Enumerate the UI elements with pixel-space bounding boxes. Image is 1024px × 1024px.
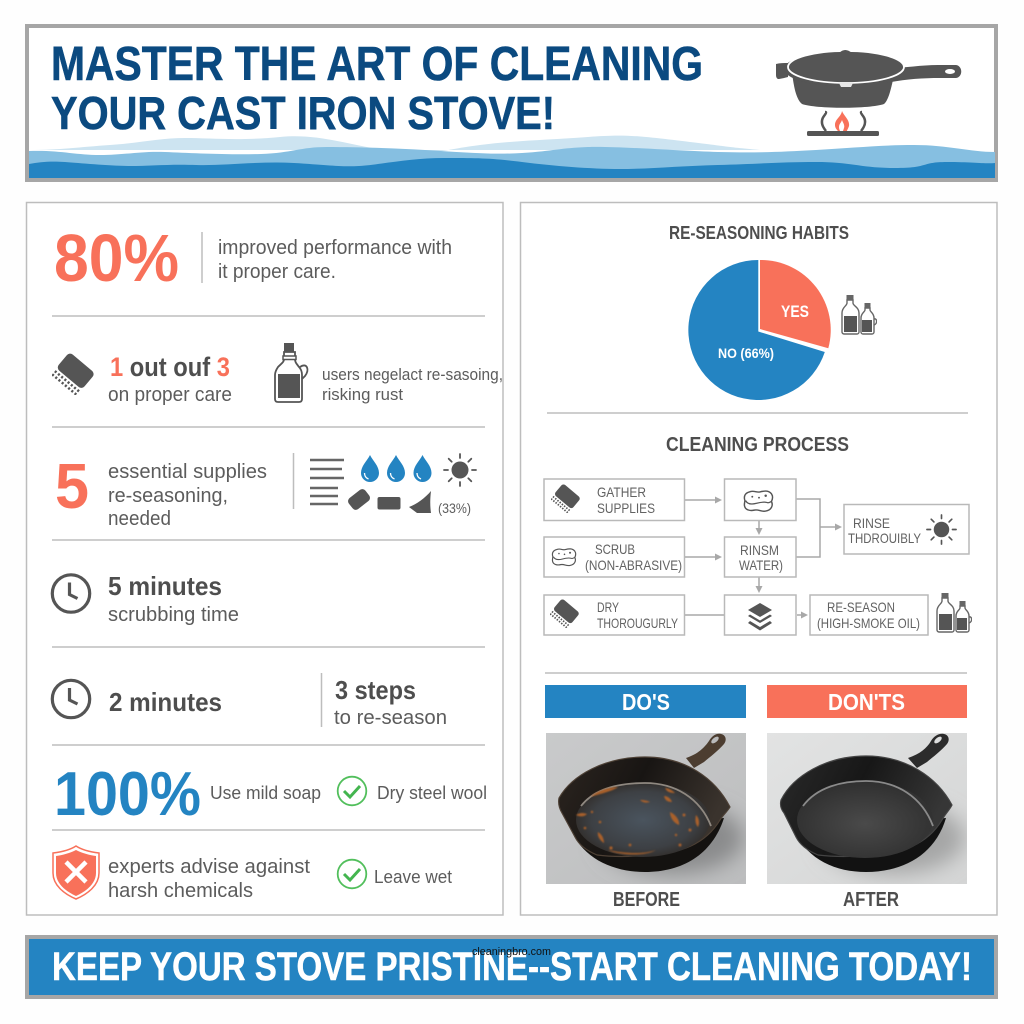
stat: 5 minutes: 5 minutes — [108, 571, 222, 601]
stat: 2 minutes and 3 steps: 3 steps — [335, 675, 416, 705]
pie chart — [688, 260, 831, 400]
stat: 80 percent — [54, 221, 452, 296]
icon: check — [338, 860, 366, 888]
stat: 1 out of 3: on proper care — [108, 384, 232, 406]
step: scrub: SCRUB — [595, 541, 635, 557]
step: gather supplies: GATHER — [597, 484, 646, 500]
footer call to action — [27, 937, 996, 997]
label: before: BEFORE — [613, 889, 680, 911]
flow connectors — [684, 496, 842, 618]
icon: oil bottles — [842, 295, 877, 334]
stat: 100 percent: 100% — [54, 760, 201, 829]
step: rinse thoroughly — [844, 504, 969, 554]
stat: 2 minutes and 3 steps: 2 minutes — [109, 687, 222, 717]
step: dry: DRY — [597, 599, 619, 615]
warning: harsh chemicals: harsh chemicals — [108, 880, 253, 902]
stat: 5 essential supplies: re-seasoning, — [108, 485, 228, 507]
step: rinse water — [724, 537, 796, 577]
icon: sun — [444, 454, 476, 486]
stat: 5 minutes — [52, 571, 239, 626]
icon: skillet on burner — [776, 50, 961, 136]
stat: 2 minutes and 3 steps — [52, 673, 447, 729]
pie chart: YES — [781, 302, 809, 321]
step: rinse thoroughly: THDROUIBLY — [848, 530, 922, 546]
step: dry — [544, 595, 684, 635]
stat: 100 percent: Dry steel wool — [377, 782, 487, 803]
step: rinse thoroughly: RINSE — [853, 515, 890, 531]
watermark: cleaningbro.com — [472, 946, 551, 958]
title: MASTER THE ART OF CLEANING — [51, 38, 703, 91]
stat: 1 out of 3: users negelact re-sasoing, — [322, 366, 503, 384]
do's header — [545, 685, 746, 718]
header banner — [27, 26, 996, 180]
heading: re-seasoning habits: RE-SEASONING HABITS — [669, 223, 849, 243]
do's header: DO'S — [622, 689, 670, 715]
step: re-season: RE-SEASON — [827, 599, 895, 615]
label: after: AFTER — [843, 889, 899, 911]
title: YOUR CAST IRON STOVE! — [51, 87, 555, 139]
header waves — [29, 136, 995, 178]
stat: 5 essential supplies: needed — [108, 508, 171, 530]
step: dry: THOROUGURLY — [597, 615, 678, 631]
icon: oil bottle — [275, 343, 307, 402]
heading: cleaning process: CLEANING PROCESS — [666, 434, 849, 456]
don'ts header — [767, 685, 967, 718]
icon: supply tools — [346, 487, 431, 513]
step: scrub: (NON-ABRASIVE) — [585, 557, 682, 573]
stat: 5 minutes: scrubbing time — [108, 604, 239, 626]
photo: clean skillet after — [767, 733, 967, 884]
step: re-season: (HIGH-SMOKE OIL) — [817, 615, 920, 631]
step: sponge — [724, 479, 796, 520]
don'ts header: DON'TS — [828, 689, 905, 715]
stat: 1 out of 3: 1 out ouf 3 — [110, 352, 230, 382]
step: rinse water: RINSM — [740, 542, 779, 558]
stat: 5 essential supplies: 5 — [55, 450, 89, 522]
photo: rusty skillet before — [546, 733, 746, 884]
stat: 80 percent: 80% — [54, 221, 179, 296]
stat: 5 essential supplies: (33%) — [438, 500, 471, 516]
pie chart: NO (66%) — [718, 345, 774, 361]
icon: oil bottles — [937, 593, 972, 632]
stat: 5 essential supplies — [55, 450, 476, 530]
icon: clock — [52, 680, 90, 718]
stat: 1 out of 3 — [51, 343, 503, 406]
stat: 5 essential supplies: essential supplies — [108, 461, 267, 483]
stat: 80 percent: improved performance with — [218, 237, 452, 259]
stat: 2 minutes and 3 steps: to re-season — [334, 707, 447, 729]
icon: shield — [53, 846, 99, 899]
icon: water drops — [361, 455, 432, 482]
title — [51, 38, 703, 139]
stat: 1 out of 3: risking rust — [322, 385, 403, 404]
stat: 100 percent: Use mild soap — [210, 782, 321, 803]
left statistics panel — [26, 202, 503, 915]
step: rinse water: WATER) — [739, 557, 783, 573]
right panel — [520, 202, 997, 915]
icon: list lines — [310, 460, 344, 504]
step: scrub — [544, 537, 684, 577]
warning: harsh chemicals: experts advise against — [108, 856, 310, 878]
icon: check — [338, 777, 366, 805]
flowchart: cleaning process — [544, 479, 972, 635]
icon: clock — [52, 575, 90, 612]
step: gather supplies: SUPPLIES — [597, 500, 655, 516]
stat: 100 percent — [54, 760, 487, 829]
warning: harsh chemicals — [53, 846, 452, 902]
step: re-season — [810, 595, 928, 635]
icon: scrub brush — [51, 352, 95, 395]
step: layers — [724, 595, 796, 635]
step: gather supplies — [544, 479, 684, 520]
warning: harsh chemicals: Leave wet — [374, 866, 452, 887]
stat: 80 percent: it proper care. — [218, 261, 336, 283]
